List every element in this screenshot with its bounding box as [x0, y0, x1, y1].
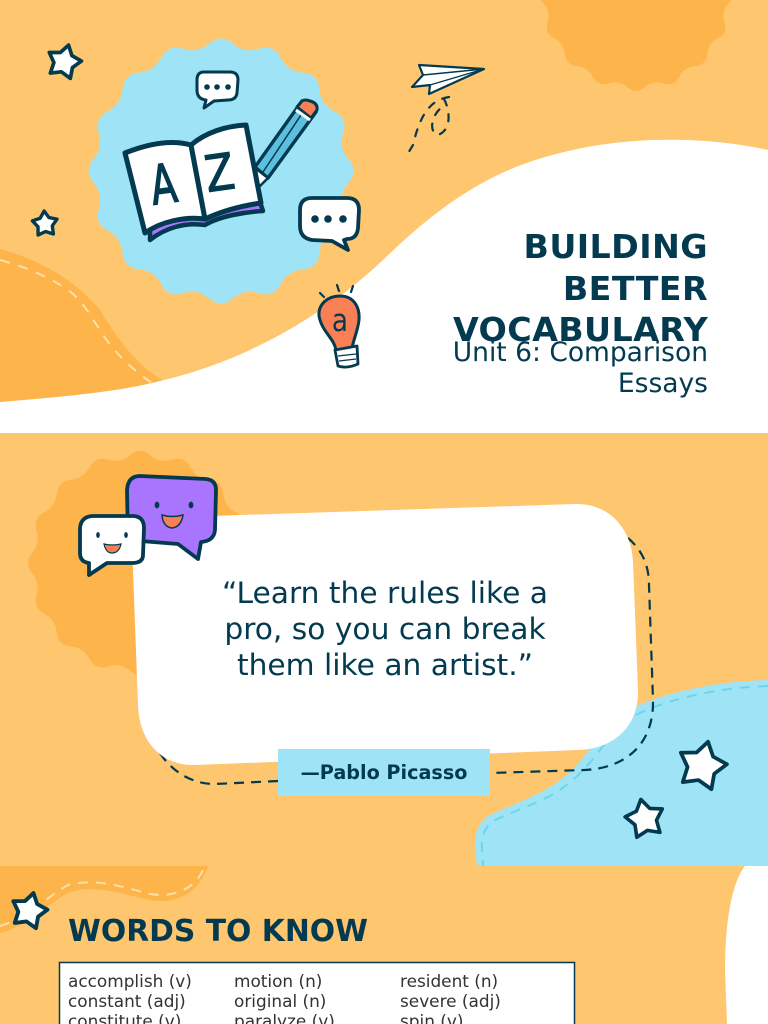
top right scallop shape — [540, 0, 732, 91]
slide 1: title slide — [0, 0, 768, 432]
subtitle: Essays — [618, 368, 708, 399]
lower left darker wave — [0, 249, 164, 402]
top left darker wave — [0, 866, 208, 933]
attribution box: —Pablo Picasso — [301, 761, 467, 784]
slide 3: words to know — [0, 866, 768, 1024]
white right shape — [725, 866, 768, 1024]
book letter A: A — [146, 152, 181, 217]
attribution box — [278, 749, 490, 796]
title: BETTER — [563, 269, 708, 308]
white curved area — [0, 140, 768, 432]
icon: star lower left — [32, 210, 58, 235]
icon: star top left — [44, 41, 85, 80]
icon: small star — [622, 795, 667, 839]
book letter Z: Z — [201, 142, 238, 204]
icon: purple speech bubble — [127, 476, 216, 559]
title: VOCABULARY — [453, 310, 708, 349]
quote text: “Learn the rules like a — [222, 576, 548, 611]
light blue dashed stitching — [482, 686, 768, 866]
icon: large speech bubble — [300, 198, 359, 250]
heading: WORDS TO KNOW — [68, 914, 368, 949]
word list table — [60, 962, 574, 1024]
column 3: severe (adj) — [400, 991, 501, 1011]
dark dashed outline around card — [158, 538, 653, 784]
icon: lightbulb with letter a — [319, 285, 359, 367]
dashed stitching on wave — [0, 260, 152, 383]
scallop behind speech bubbles — [28, 451, 252, 675]
column 2: motion (n) — [234, 971, 322, 991]
icon: star — [8, 889, 51, 930]
column 1: constant (adj) — [68, 991, 186, 1011]
blue scallop badge — [89, 38, 354, 304]
column 3: resident (n) — [400, 971, 498, 991]
blue wave lower right — [475, 680, 768, 866]
icon: small speech bubble — [197, 72, 238, 108]
subtitle: Unit 6: Comparison — [453, 337, 708, 368]
quote card — [133, 504, 638, 765]
icon: paper plane with dashed trail — [407, 65, 484, 155]
title: BUILDING — [524, 227, 708, 266]
quote text: them like an artist.” — [237, 648, 533, 683]
icon: white speech bubble — [80, 516, 144, 575]
lightbulb letter: a — [332, 302, 348, 339]
icon: large star — [674, 736, 731, 791]
icon: open book with A and Z — [125, 125, 263, 240]
column 2: original (n) — [234, 991, 326, 1011]
dashed stitching on wave — [0, 870, 203, 926]
slide 2: quote slide — [0, 433, 768, 866]
icon: pencil — [250, 100, 317, 192]
column 1: accomplish (v) — [68, 971, 192, 991]
quote text: pro, so you can break — [224, 612, 546, 647]
